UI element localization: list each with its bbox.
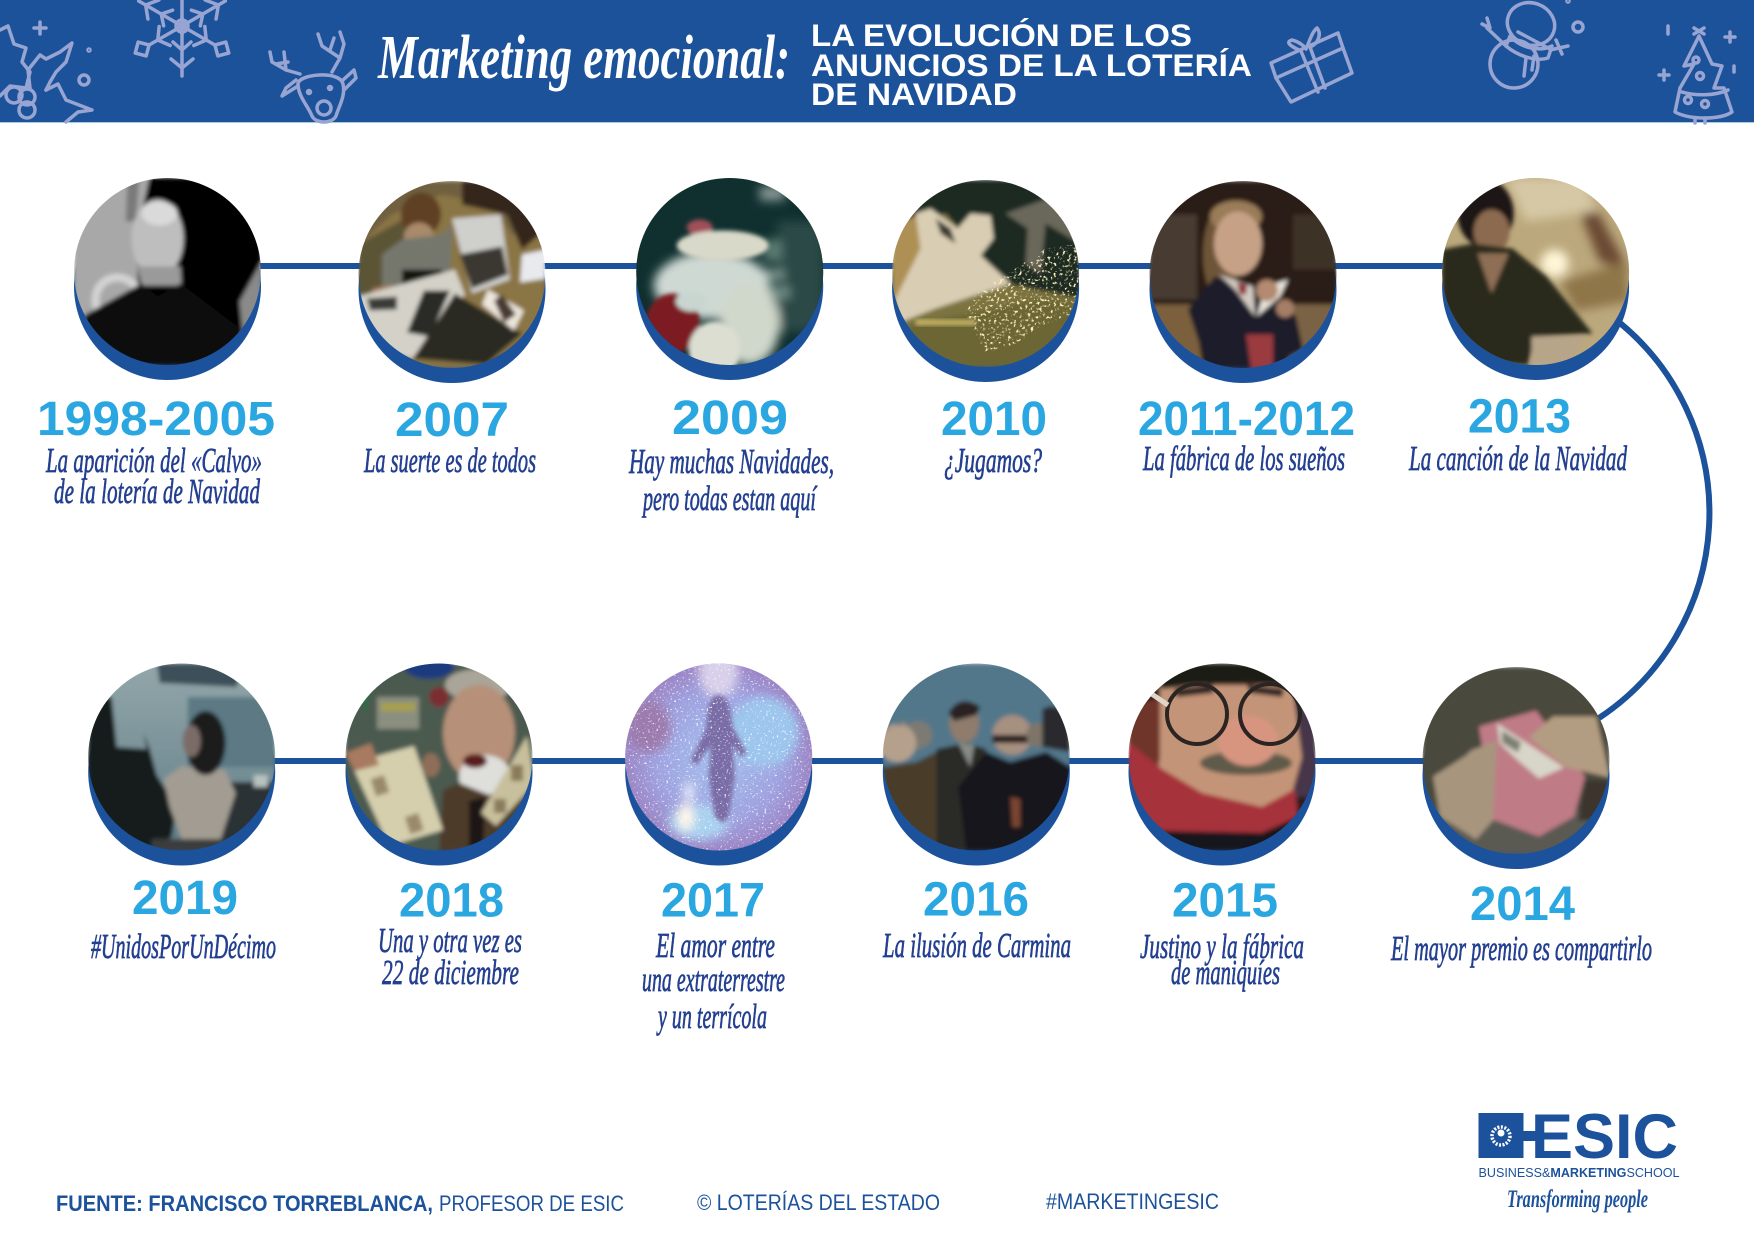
icon: reindeer [270,32,356,122]
icon: tree [1659,26,1735,123]
logo tagline: Transforming people [1507,1186,1648,1213]
photo: crowd with Carmina [878,663,1070,866]
milestone: 2011-2012 [1138,180,1355,478]
photo: bald man [74,178,262,380]
milestone: 2015 [1128,663,1316,992]
photo: galaxy silhouette [625,646,813,866]
year: 2016 [923,874,1029,927]
photo: boy with photographs [358,180,546,383]
caption [1140,927,1304,992]
year: 2010 [941,393,1047,446]
caption: Una y otra vez es [378,921,522,960]
footer: source: PROFESOR DE ESIC [439,1191,624,1216]
icon: gift [1271,28,1352,102]
title sans: DE NAVIDAD [811,76,1017,112]
caption: Justino y la fábrica [1140,927,1304,966]
caption: La ilusión de Carmina [882,926,1071,965]
year: 2013 [1468,391,1571,444]
photo: woman in bar [88,663,276,866]
header banner [0,0,1754,123]
logo wordmark: ESIC [1531,1102,1678,1172]
footer: hashtag: #MARKETINGESIC [1046,1189,1219,1214]
caption: La aparición del «Calvo» [45,441,262,480]
caption: pero todas estan aquí [641,479,818,518]
year: 2011-2012 [1138,393,1355,446]
milestone: 2019 [88,663,276,966]
year: 2015 [1172,875,1278,928]
photo: golden fairy [892,180,1080,382]
caption [628,442,834,518]
title script: Marketing emocional: [377,24,790,92]
ESIC logo [1478,1102,1680,1213]
caption [378,921,522,992]
milestone: 2018 [345,655,535,992]
year: 2009 [672,392,788,445]
milestone: 2017 [625,646,813,1036]
caption: #UnidosPorUnDécimo [91,927,276,966]
caption: 22 de diciembre [382,953,519,992]
photo: Santa Claus [636,178,824,380]
year: 2007 [395,394,509,447]
milestone: 1998-2005 [37,178,275,511]
photo: singer in gold hall [1442,178,1630,380]
emblem square [1478,1113,1540,1158]
caption: de maniquíes [1171,953,1280,992]
footer: copyright: © LOTERÍAS DEL ESTADO [697,1190,940,1215]
milestone: 2010 [892,180,1080,480]
title sans [811,17,1252,112]
title sans: ANUNCIOS DE LA LOTERÍA [811,47,1252,83]
caption: El amor entre [655,926,775,965]
timeline connector line [260,266,1709,761]
milestone: 2016 [878,663,1071,965]
title sans: LA EVOLUCIÓN DE LOS [811,17,1192,53]
caption: y un terrícola [656,997,767,1036]
year: 2014 [1470,878,1575,931]
logo subtitle: BUSINESS&MARKETINGSCHOOL [1478,1166,1680,1180]
caption: ¿Jugamos? [944,441,1042,480]
photo: man with lottery tickets [345,655,535,866]
icon: snowflake [130,0,234,76]
milestone: 2007 [358,180,546,480]
caption: Hay muchas Navidades, [628,442,834,481]
icon: holly [0,22,92,122]
photo: girl with notepad [1149,180,1337,383]
caption [45,441,262,511]
milestone: 2013 [1408,178,1630,478]
milestone: 2009 [628,178,834,518]
milestone: 2014 [1390,666,1652,968]
year: 2019 [132,872,238,925]
caption: una extraterrestre [642,960,785,999]
year: 2018 [399,875,504,928]
icon: snowman [1482,0,1583,88]
year: 1998-2005 [37,393,275,446]
caption [642,926,785,1036]
caption: La fábrica de los sueños [1142,439,1345,478]
year: 2017 [661,875,765,928]
photo: puppet Justino [1128,663,1316,866]
footer: source: FUENTE: FRANCISCO TORREBLANCA, [56,1191,433,1216]
caption: de la lotería de Navidad [54,472,260,511]
caption: La suerte es de todos [363,441,536,480]
photo: hands with envelope [1422,666,1610,869]
